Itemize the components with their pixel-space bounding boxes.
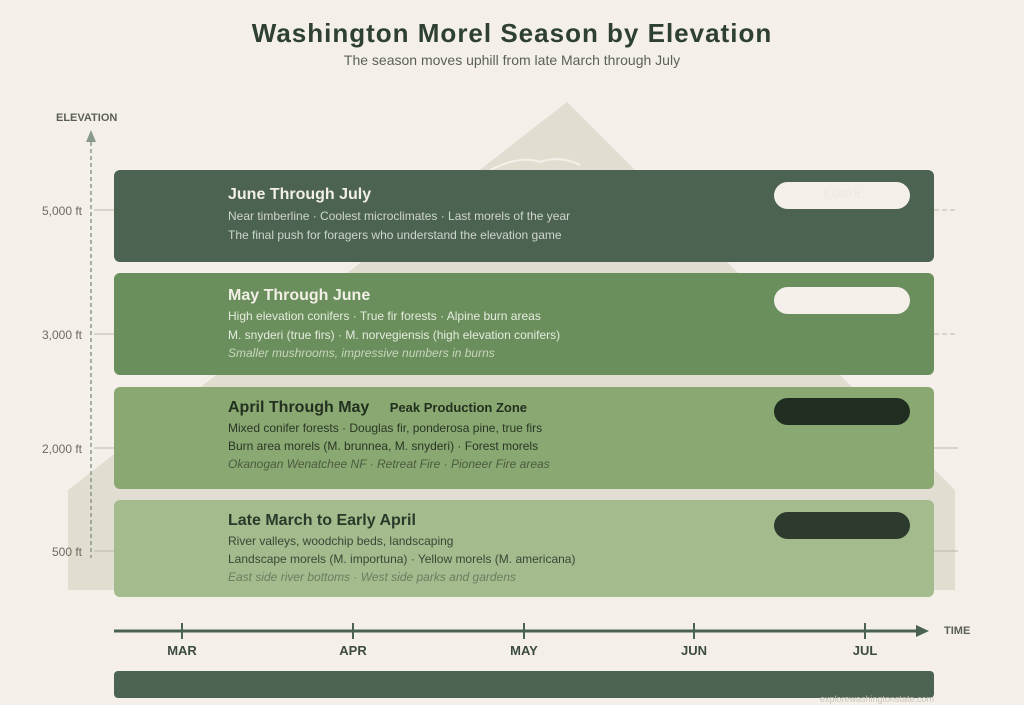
- band: April through May: Burn area morels (M. brunnea, M. snyderi) · Forest morels: [228, 439, 538, 453]
- month labels: MAY: [510, 643, 538, 658]
- month labels: JUN: [681, 643, 707, 658]
- text: 500 ft: [52, 545, 82, 559]
- time axis: TIME: [944, 625, 970, 637]
- band: June through July: June Through July: [228, 186, 371, 203]
- text: 3,000 ft: [42, 328, 82, 342]
- band: Late March to Early April: [114, 500, 934, 597]
- band: Late March to Early April: Late March to Early April: [228, 512, 416, 529]
- band: Late March to Early April: Landscape morels (M. importuna) · Yellow morels (M. americana): [228, 552, 575, 566]
- band: April through May: April Through May Peak Production Zone: [228, 399, 527, 416]
- month labels: APR: [339, 643, 367, 658]
- band: Late March to Early April: River valleys, woodchip beds, landscaping: [228, 534, 453, 548]
- text: 2,000 ft: [42, 442, 82, 456]
- source: explorewashingtonstate.com: [820, 694, 934, 704]
- elevation axis: ELEVATION: [56, 112, 117, 124]
- time axis: [114, 625, 970, 637]
- band: April through May: [114, 387, 934, 489]
- footer bar: [114, 671, 934, 698]
- title: Washington Morel Season by Elevation: [252, 18, 772, 48]
- band: April through May: Mixed conifer forests · Douglas fir, ponderosa pine, true firs: [228, 421, 542, 435]
- band: June through July: 5,000 ft: [824, 189, 860, 201]
- band: Late March to Early April: East side river bottoms · West side parks and gardens: [228, 570, 516, 584]
- band: June through July: [114, 170, 934, 262]
- band: June through July: The final push for foragers who understand the elevation game: [228, 228, 562, 242]
- band: May through June: M. snyderi (true firs) · M. norvegiensis (high elevation conifers): [228, 328, 560, 342]
- band: May through June: May Through June: [228, 287, 370, 304]
- band: May through June: High elevation conifers · True fir forests · Alpine burn areas: [228, 309, 541, 323]
- elevation axis: [56, 112, 117, 558]
- subtitle: The season moves uphill from late March through July: [344, 52, 680, 68]
- band: May through June: Smaller mushrooms, impressive numbers in burns: [228, 346, 495, 360]
- band: April through May: Okanogan Wenatchee NF · Retreat Fire · Pioneer Fire areas: [228, 457, 550, 471]
- band: May through June: [114, 273, 934, 375]
- y labels: 5,000 ft: [42, 204, 82, 218]
- band: June through July: Near timberline · Coolest microclimates · Last morels of the year: [228, 209, 570, 223]
- month labels: JUL: [853, 643, 877, 658]
- month labels: MAR: [167, 643, 197, 658]
